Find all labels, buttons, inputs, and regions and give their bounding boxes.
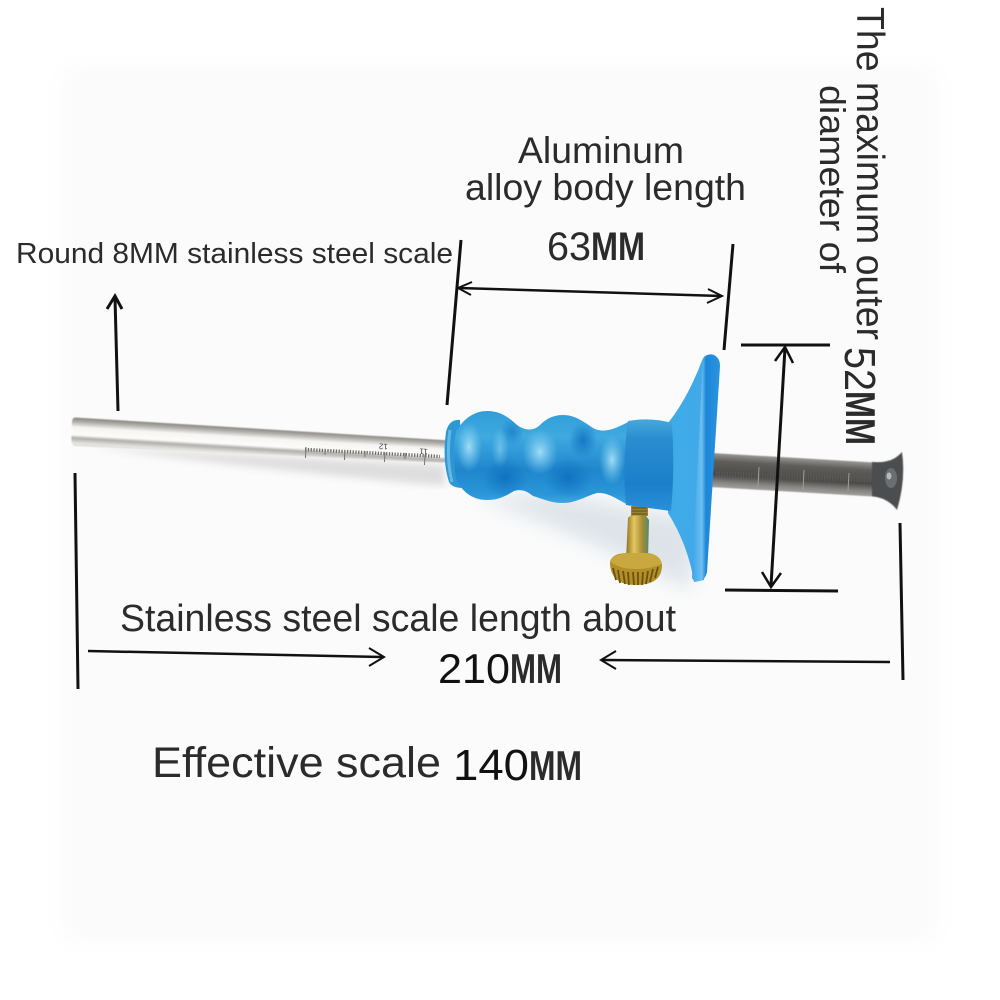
label: effective scale	[152, 739, 582, 790]
fence disk flare	[668, 358, 712, 582]
fence disk rim	[692, 354, 720, 581]
label: rotated text: diameter of	[812, 85, 853, 274]
product photo: wheel marking gauge	[71, 354, 903, 590]
extension lines and arrow	[447, 240, 733, 405]
label: effective scale: Effective scale	[152, 739, 441, 787]
label: rotated text: The maximum outer	[848, 7, 891, 340]
body shadow	[470, 495, 700, 590]
rod shadow	[90, 447, 445, 486]
dimension: maximum outer diameter	[725, 7, 891, 591]
value: 63MM: 63	[547, 225, 591, 269]
value: 210MM	[438, 645, 562, 692]
label: rotated text	[812, 7, 891, 340]
stainless steel rod with scale: 11	[419, 447, 428, 456]
stainless steel rod with scale	[71, 418, 450, 465]
value: 52MM: 52	[835, 347, 884, 391]
value: 52MM	[835, 347, 884, 445]
label: round scale: Round 8MM stainless steel scale	[16, 238, 453, 270]
value: 52MM: MM	[837, 391, 884, 445]
collar	[624, 419, 673, 511]
flared end of rod	[872, 452, 903, 510]
rod scale digits: 12	[378, 442, 388, 451]
value: 210MM: 210	[438, 645, 510, 692]
blue aluminum body	[445, 354, 720, 582]
grip	[454, 411, 630, 506]
value: 63MM: MM	[591, 225, 645, 269]
label: aluminum alloy body length: alloy body length	[465, 167, 746, 208]
end cap	[445, 420, 463, 488]
extension lines and arrow	[725, 345, 838, 591]
label: effective scale: 140	[453, 741, 529, 790]
brass thumb screw	[610, 506, 662, 585]
extension lines and arrows	[75, 473, 903, 689]
dimension: scale length	[75, 473, 903, 692]
label: aluminum alloy body length	[465, 130, 746, 208]
dimension: scale label and arrow	[16, 238, 453, 411]
value: 63MM	[547, 225, 645, 269]
label: effective scale: MM	[529, 742, 582, 789]
label: aluminum alloy body length: Aluminum	[518, 130, 684, 171]
arrow: up	[107, 296, 122, 411]
dark rod behind the fence	[710, 452, 903, 510]
dimension: body length	[447, 130, 746, 405]
value: 210MM: MM	[510, 645, 562, 692]
label: stainless steel scale length: Stainless steel scale length about	[120, 598, 676, 640]
